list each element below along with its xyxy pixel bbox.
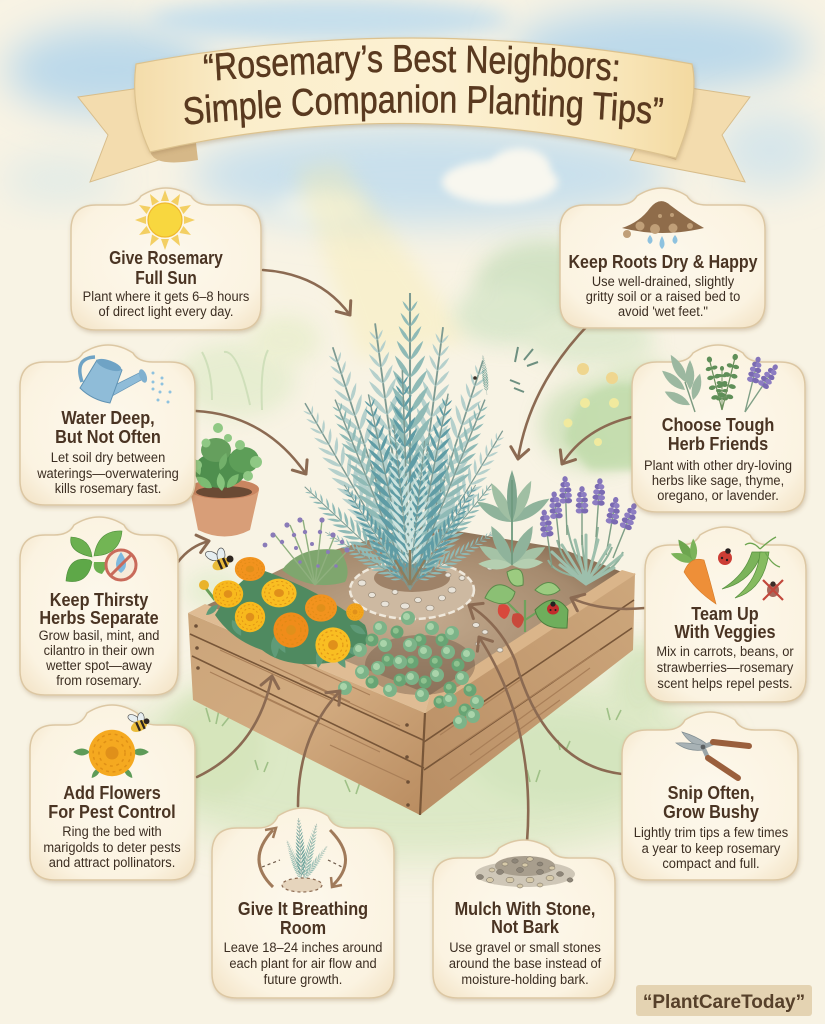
- body text: Ring the bed with: [62, 824, 162, 839]
- body text: marigolds to deter pests: [43, 840, 181, 855]
- body text: [83, 289, 250, 319]
- banner: main scroll: [135, 38, 694, 158]
- thyme plant with purple blooms: [263, 517, 350, 585]
- card: Keep Thirsty Herbs Separate: [20, 517, 178, 695]
- banner: folds: [150, 143, 198, 162]
- body text: avoid 'wet feet.": [618, 304, 708, 319]
- card: Give It Breathing Room: [212, 808, 394, 998]
- body text: Lightly trim tips a few times: [634, 825, 788, 840]
- body text: a year to keep rosemary: [642, 841, 781, 856]
- bed: right face: [420, 573, 635, 815]
- body text: each plant for air flow and: [229, 956, 377, 971]
- sage plant: [474, 470, 552, 570]
- card: Team Up With Veggies: [645, 527, 806, 702]
- heading: Water Deep,: [61, 407, 155, 428]
- arrow: breathing room to bed: [298, 691, 340, 806]
- body text: gritty soil or a raised bed to: [586, 289, 740, 304]
- background garden: flowers and foliage: [202, 350, 660, 794]
- icon: pruning shears: [676, 732, 749, 778]
- card: Snip Often, Grow Bushy: [622, 712, 798, 880]
- title line 1: “Rosemary’s Best Neighbors:: [204, 44, 618, 83]
- lavender plant: [538, 476, 641, 584]
- heading: [109, 248, 223, 288]
- heading: Choose Tough: [662, 414, 774, 435]
- body text: Plant where it gets 6–8 hours: [83, 289, 250, 304]
- heading: Give It Breathing: [238, 898, 368, 919]
- body text: wetter spot—away: [45, 658, 152, 673]
- heading: Herbs Separate: [39, 607, 159, 628]
- heading: Room: [280, 917, 326, 938]
- heading: Add Flowers: [63, 782, 161, 803]
- potted herbs: [189, 423, 262, 536]
- mulch ring of stones: [350, 561, 503, 652]
- body text: scent helps repel pests.: [657, 676, 793, 691]
- body text: Use gravel or small stones: [449, 940, 601, 955]
- icon: marigold and bee: [73, 713, 149, 780]
- strawberry plant with ladybug: [485, 569, 568, 632]
- bed: left face: [188, 613, 425, 815]
- body text: waterings—overwatering: [36, 466, 179, 481]
- bee near marigolds: [204, 548, 234, 573]
- heading: [674, 603, 776, 642]
- heading: With Veggies: [674, 621, 776, 642]
- body text: compact and full.: [662, 856, 760, 871]
- icon: basil with no-water symbol: [66, 531, 136, 582]
- heading: Herb Friends: [668, 433, 768, 454]
- heading: [39, 589, 159, 628]
- body text: [43, 824, 181, 870]
- icon: ladybugs: [718, 548, 783, 600]
- arrow: mulch to stones: [479, 637, 528, 842]
- heading: [662, 414, 774, 454]
- icon: soil pile with drops: [622, 201, 704, 249]
- raised garden bed: [188, 525, 636, 815]
- card: Keep Roots Dry & Happy: [560, 188, 765, 328]
- heading: Keep Thirsty: [50, 589, 149, 610]
- heading: [455, 898, 595, 937]
- body text: moisture-holding bark.: [461, 972, 589, 987]
- body text: kills rosemary fast.: [55, 481, 161, 496]
- icon: herb sprigs: [659, 352, 782, 415]
- title line 2: Simple Companion Planting Tips”: [184, 84, 664, 130]
- arrow: water to plant: [196, 411, 306, 474]
- body text: [224, 940, 382, 987]
- bed: top rim: [188, 604, 430, 713]
- banner: right tail: [630, 88, 750, 182]
- creeping ground-cover herbs: [338, 611, 484, 729]
- arrow: flowers to marigolds: [197, 676, 272, 777]
- body text: Plant with other dry-loving: [644, 458, 792, 473]
- body text: [39, 628, 159, 688]
- bed: soil: [205, 525, 622, 697]
- body text: strawberries—rosemary: [657, 660, 794, 675]
- body text: [644, 458, 792, 503]
- card: Give Rosemary Full Sun: [71, 188, 261, 330]
- body text: of direct light every day.: [99, 304, 233, 319]
- heading: Full Sun: [135, 268, 197, 288]
- snipped rosemary sprig with cut marks: [473, 347, 538, 395]
- heading: [238, 898, 368, 938]
- icon: sun: [135, 190, 195, 250]
- body text: and attract pollinators.: [49, 855, 175, 870]
- body text: Use well-drained, slightly: [592, 274, 734, 289]
- body text: [586, 274, 740, 319]
- ladybug: [547, 601, 559, 614]
- heading: Not Bark: [491, 916, 559, 937]
- rosemary plant: [291, 293, 515, 595]
- body text: [449, 940, 601, 987]
- body text: cilantro in their own: [44, 643, 154, 658]
- body text: [36, 450, 179, 496]
- heading: Mulch With Stone,: [455, 898, 595, 919]
- card: Mulch With Stone, Not Bark: [433, 840, 615, 998]
- watermark: “PlantCareToday”: [643, 992, 805, 1013]
- arrow: tough herbs to sage: [562, 417, 632, 464]
- heading: Give Rosemary: [109, 248, 223, 268]
- heading: [55, 407, 161, 447]
- heading: For Pest Control: [48, 801, 176, 822]
- heading: But Not Often: [55, 426, 161, 447]
- body text: [656, 644, 794, 691]
- heading: [48, 782, 176, 822]
- icon: carrot: [669, 537, 716, 604]
- card: Water Deep, But Not Often: [20, 345, 195, 505]
- watermark: [636, 985, 812, 1016]
- heading: Grow Bushy: [663, 801, 759, 822]
- body text: Grow basil, mint, and: [39, 628, 159, 643]
- bed: planks: [190, 600, 634, 815]
- icon: pea pods: [722, 537, 780, 598]
- arrows: [178, 270, 645, 842]
- card: Choose Tough Herb Friends: [632, 345, 805, 512]
- body text: herbs like sage, thyme,: [652, 473, 784, 488]
- icon: watering can: [80, 356, 172, 404]
- body text: oregano, or lavender.: [657, 488, 779, 503]
- icon: gravel pile: [475, 856, 575, 888]
- arrow: thirsty herbs to pot: [178, 541, 209, 562]
- arrow: veggies to strawberries: [571, 598, 645, 609]
- marigolds: [199, 557, 368, 670]
- arrow: sun to plant: [263, 270, 350, 315]
- body text: Leave 18–24 inches around: [224, 940, 382, 955]
- arrow: snip to plant: [469, 605, 622, 774]
- title banner: [77, 37, 751, 183]
- body text: future growth.: [264, 972, 342, 987]
- heading: Snip Often,: [668, 782, 754, 803]
- body text: Let soil dry between: [51, 450, 165, 465]
- heading: [663, 782, 759, 822]
- heading: Keep Roots Dry & Happy: [569, 251, 758, 272]
- arrow: roots to soil: [518, 324, 589, 459]
- body text: [634, 825, 788, 871]
- body text: from rosemary.: [56, 673, 142, 688]
- body text: Mix in carrots, beans, or: [656, 644, 794, 659]
- body text: around the base instead of: [449, 956, 601, 971]
- banner: left tail: [78, 88, 190, 182]
- card: Add Flowers For Pest Control: [30, 705, 195, 880]
- heading: Team Up: [691, 603, 759, 624]
- icon: rosemary with spacing arrows: [259, 818, 346, 892]
